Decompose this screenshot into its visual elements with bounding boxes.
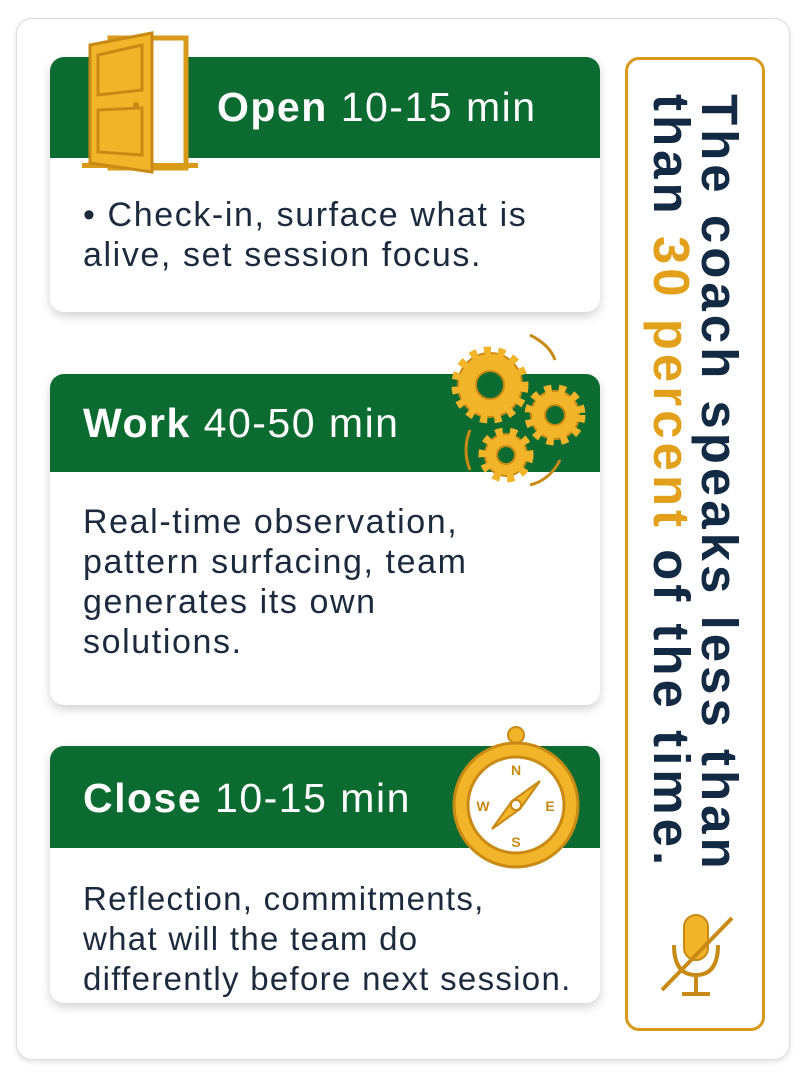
icon: muted microphone — [660, 914, 734, 996]
panel: side callout — [625, 57, 765, 1031]
text: work: generates its own — [83, 583, 377, 621]
text: open — [83, 196, 527, 274]
text: close: Reflection, commitments, — [83, 880, 485, 917]
icon: compass — [452, 726, 580, 868]
text: work: pattern surfacing, team — [83, 543, 468, 581]
vertical quote text: The coach speaks less than — [691, 94, 748, 873]
icon: compass: W — [476, 798, 490, 814]
text: open: alive, set session focus. — [83, 236, 482, 274]
panel: work — [50, 374, 600, 705]
icon: compass: S — [511, 834, 521, 850]
panel: open — [50, 57, 600, 312]
text: work: Real-time observation, — [83, 503, 458, 541]
icon: door — [82, 31, 198, 174]
icon: gears — [452, 334, 586, 486]
header: work — [50, 374, 600, 472]
text: close: what will the team do — [83, 920, 418, 957]
header: close — [50, 746, 600, 848]
header: close: Close 10-15 min — [83, 775, 411, 821]
text: close: differently before next session. — [83, 960, 572, 997]
icon: compass: E — [545, 798, 555, 814]
icon: compass: N — [511, 762, 521, 778]
panel: close — [50, 746, 600, 1003]
header: open: Open 10-15 min — [217, 84, 537, 130]
header: work: Work 40-50 min — [83, 400, 399, 446]
text: work — [83, 503, 468, 661]
text: work: solutions. — [83, 623, 243, 661]
vertical quote text: than 30 percent of the time. — [643, 94, 700, 869]
text: open: • Check-in, surface what is — [83, 196, 527, 234]
vertical quote text — [643, 94, 748, 873]
header: open — [50, 57, 600, 158]
text: close — [83, 880, 572, 997]
